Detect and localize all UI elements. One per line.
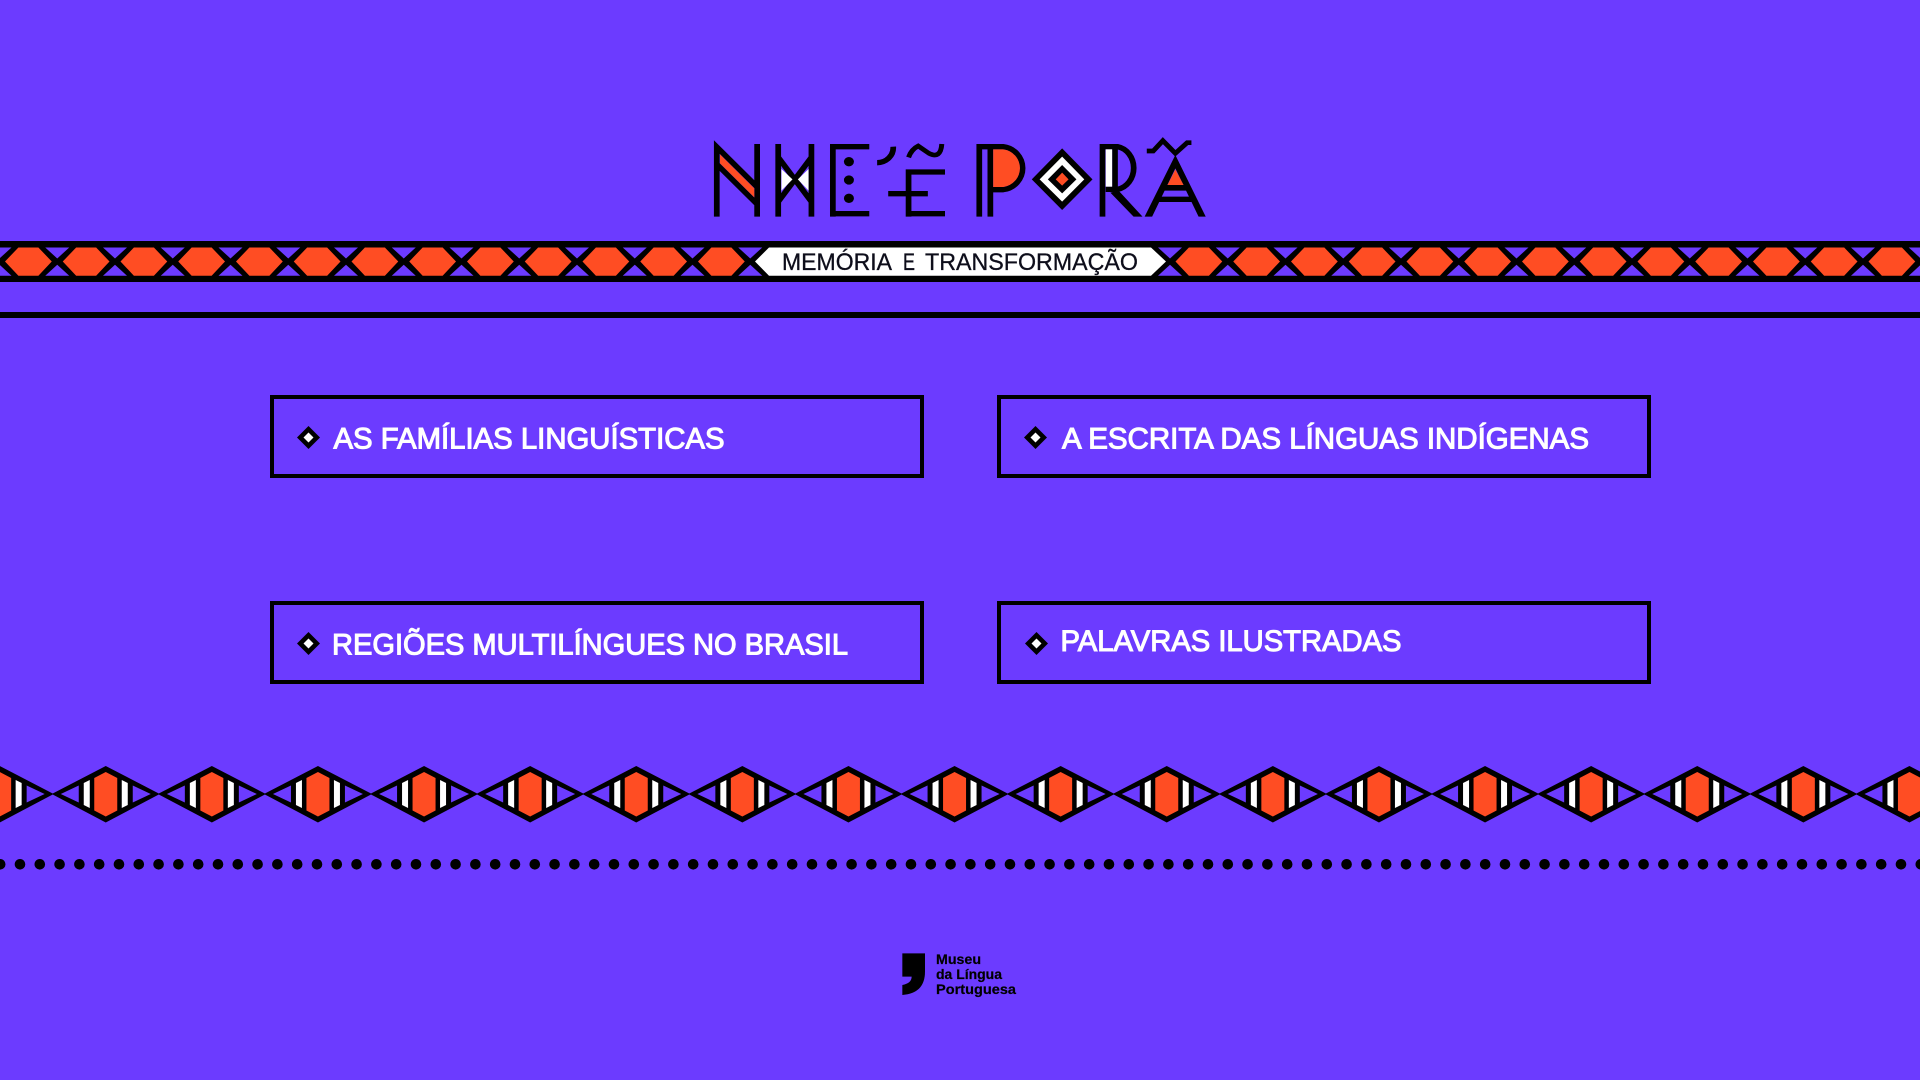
museum name: Museu (936, 951, 981, 967)
icon: diamond bullet (297, 632, 320, 655)
box: Regiões multilíngues no Brasil (272, 603, 922, 682)
icon: comma mark (902, 953, 925, 995)
subtitle text: TRANSFORMAÇÃO (925, 249, 1138, 276)
letter P (979, 147, 1023, 217)
diamond chain pattern (0, 766, 1920, 822)
museum name: Portuguesa (936, 981, 1016, 997)
subtitle text: E (903, 249, 915, 276)
dotted line (0, 859, 1920, 870)
letter R (1102, 147, 1142, 217)
label: AS FAMÍLIAS LINGUÍSTICAS (334, 422, 724, 456)
subtitle banner (755, 248, 1166, 276)
letter H (778, 144, 811, 217)
subtitle text (782, 249, 1138, 276)
diamond O (1032, 148, 1092, 210)
subtitle text: MEMÓRIA (782, 249, 892, 276)
horizontal rule (0, 312, 1920, 318)
label: PALAVRAS ILUSTRADAS (1060, 625, 1402, 658)
title logo: Nhe'ẽ Porã (717, 141, 1206, 217)
museum name: da Língua (936, 966, 1002, 982)
apostrophe (877, 147, 893, 163)
band pattern: left (0, 248, 762, 276)
letter N (717, 144, 757, 217)
box: A escrita das línguas indígenas (999, 397, 1649, 476)
letter E with dots (830, 144, 869, 217)
label: A ESCRITA DAS LÍNGUAS INDÍGENAS (1062, 422, 1589, 456)
band pattern: right (1158, 248, 1920, 276)
museum name (936, 951, 1016, 997)
box: As famílias linguísticas (272, 397, 922, 476)
museum logo (902, 951, 1016, 997)
icon: diamond bullet (1025, 632, 1048, 655)
icon: diamond bullet (1024, 426, 1047, 449)
letter E tilde (888, 144, 945, 217)
label: REGIÕES MULTILÍNGUES NO BRASIL (332, 628, 848, 662)
letter A tilde (1145, 141, 1206, 217)
patterned band with subtitle (0, 241, 1920, 282)
box: Palavras ilustradas (999, 603, 1649, 682)
icon: diamond bullet (297, 426, 320, 449)
